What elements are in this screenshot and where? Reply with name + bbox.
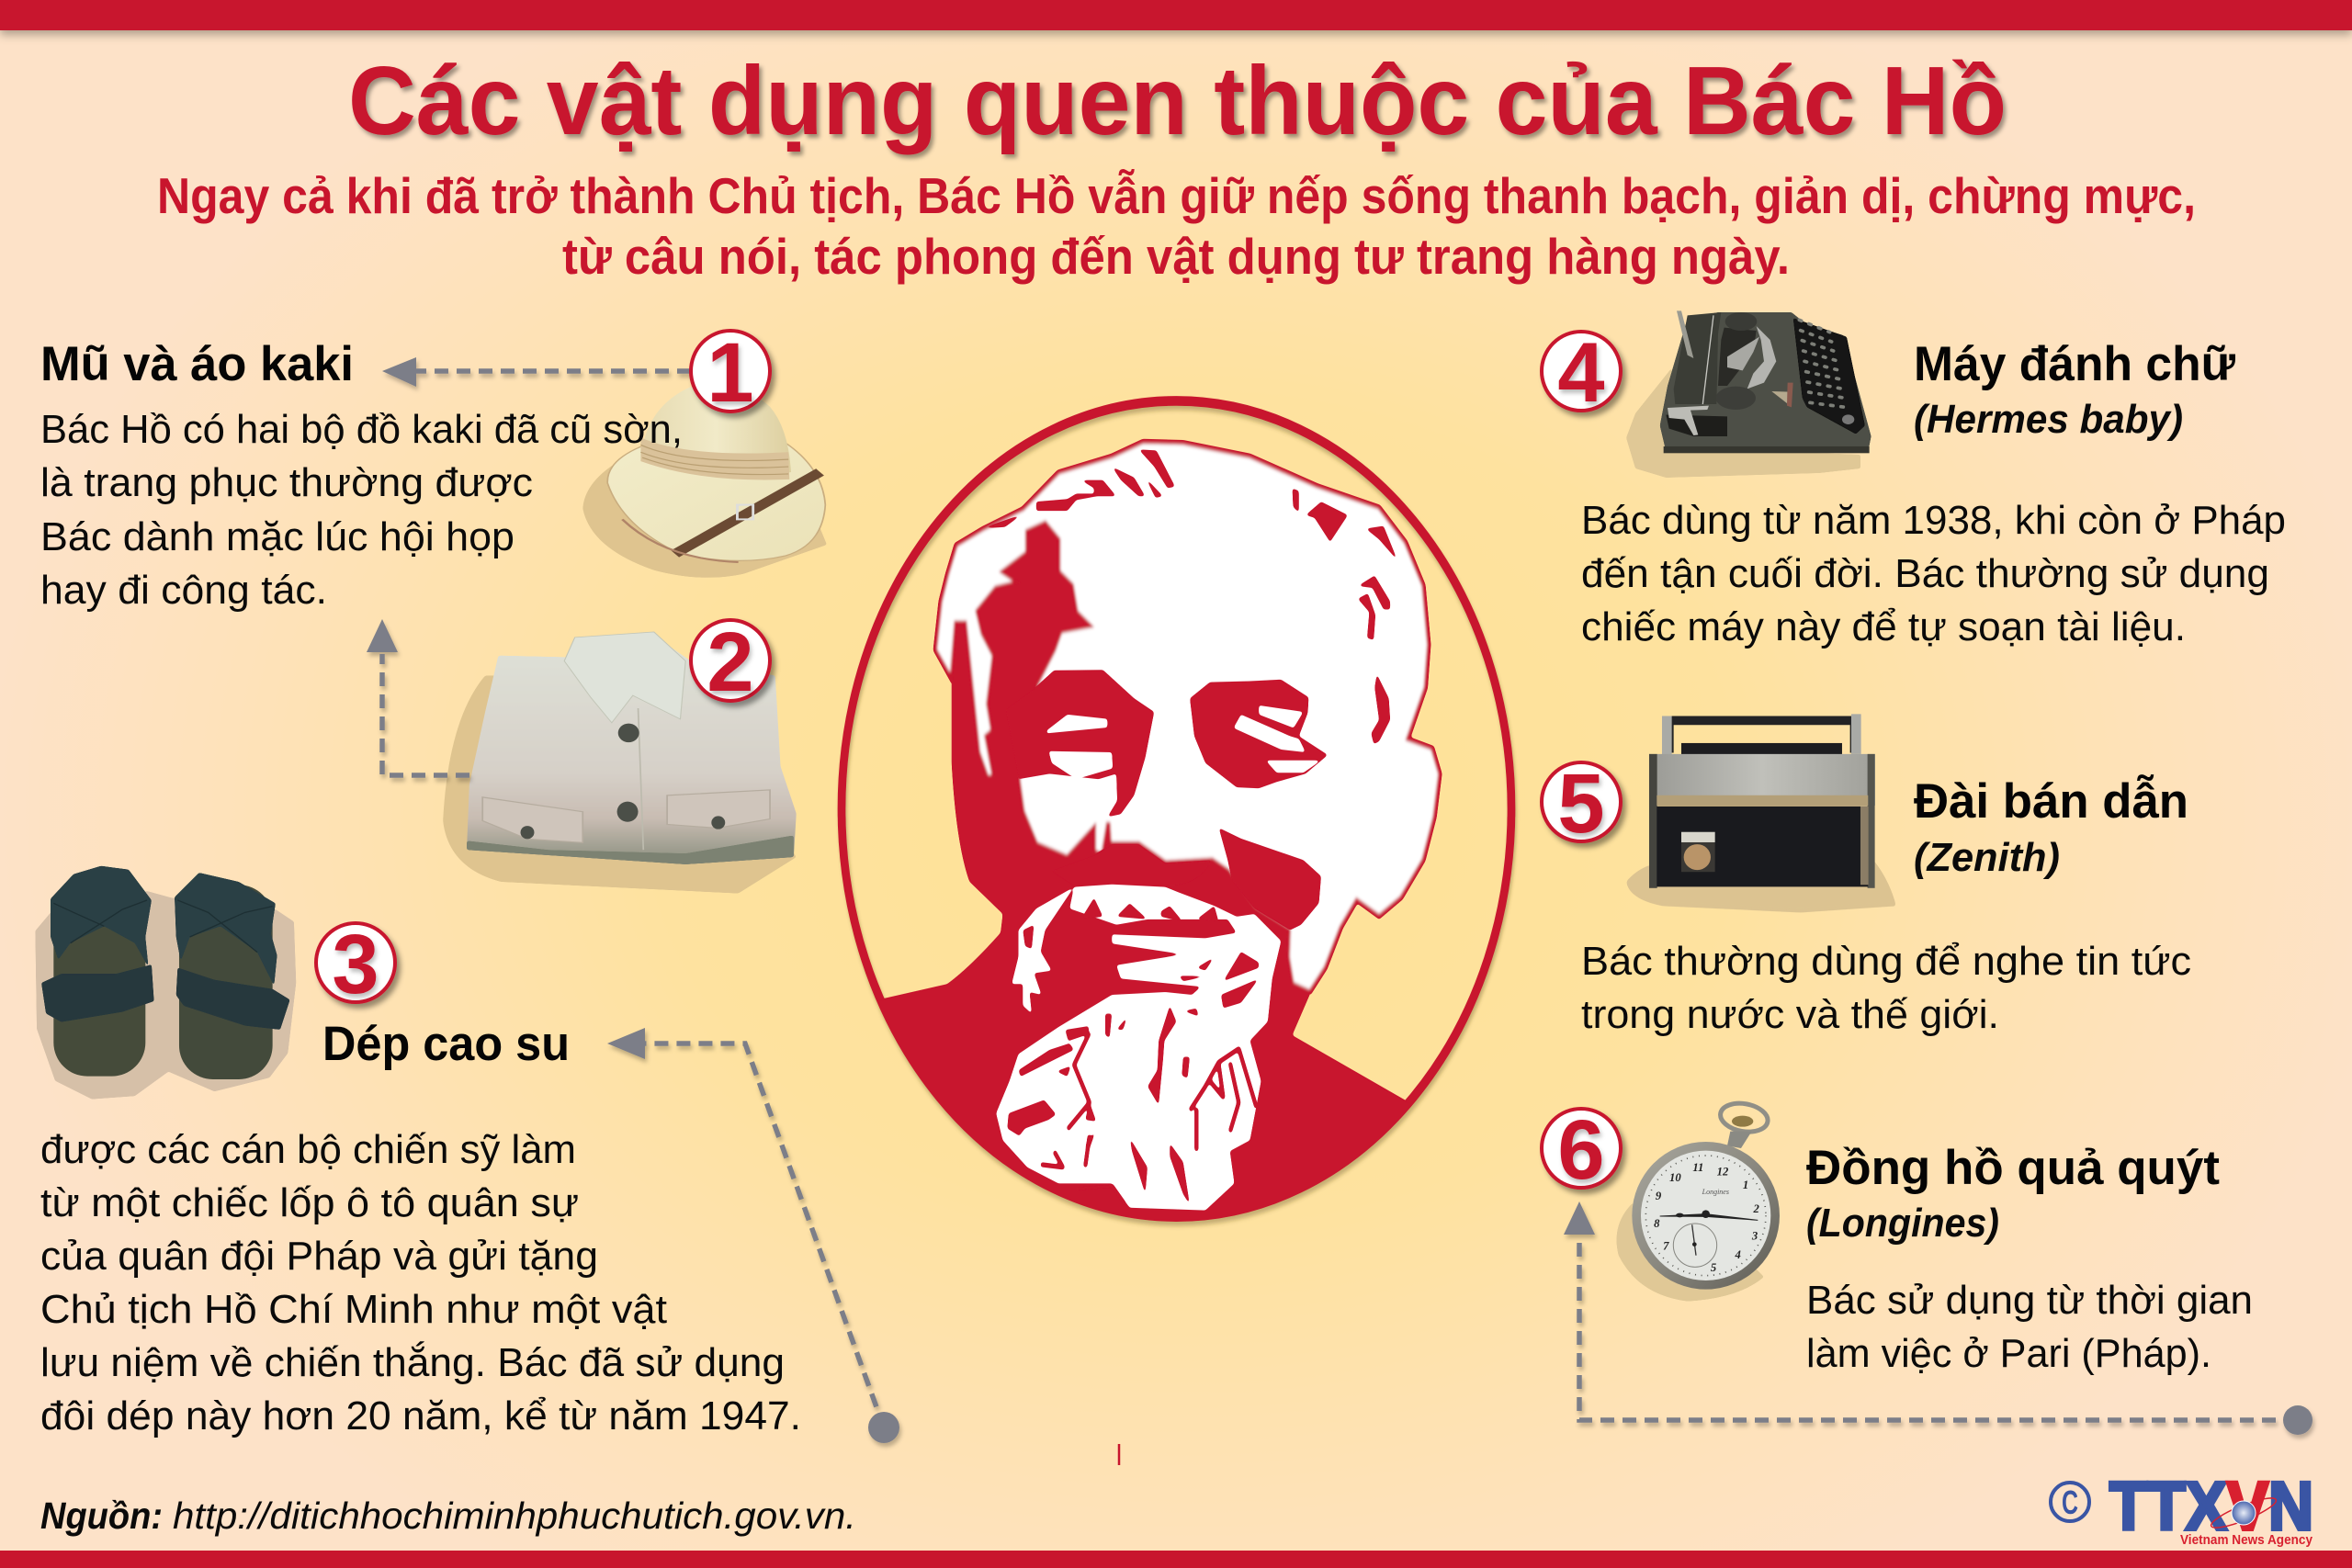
right band [176, 967, 290, 1030]
number badge 2: 2 [707, 615, 754, 709]
heading: Máy đánh chữ: (Hermes baby) [1914, 397, 2183, 442]
subtitle: từ câu nói, tác phong đến vật dụng tư trang hàng ngày. [562, 228, 1790, 285]
watch stem [1727, 1132, 1752, 1148]
watch sub dial [1673, 1224, 1717, 1267]
number badge 6: 6 [1557, 1103, 1605, 1197]
copyright symbol [2051, 1483, 2089, 1521]
shirt body [467, 636, 797, 864]
logo mark [1771, 391, 1790, 406]
hair strokes [980, 449, 1397, 744]
text: watch: làm việc ở Pari (Pháp). [1806, 1331, 2211, 1376]
type basket [1747, 326, 1776, 389]
left band [41, 964, 154, 1022]
white beard [996, 885, 1281, 1211]
shirt collar [564, 632, 685, 723]
watch case [1632, 1142, 1780, 1290]
globe [2209, 1493, 2278, 1533]
watch numerals: 11 [1692, 1161, 1703, 1174]
radio shadow [1626, 861, 1896, 912]
heading: Đồng hồ quả quýt: Đồng hồ quả quýt [1806, 1141, 2220, 1195]
text: sandals: lưu niệm về chiến thắng. Bác đã sử dụng [40, 1340, 785, 1385]
hat band [640, 437, 789, 479]
heading: Đài bán dẫn: (Zenith) [1914, 835, 2060, 880]
left eye socket [1005, 670, 1154, 817]
text: typewriter: đến tận cuối đời. Bác thường sử dụng [1581, 551, 2269, 596]
heading: Đồng hồ quả quýt [1806, 1141, 2220, 1246]
text: sandals: đôi dép này hơn 20 năm, kể từ năm 1947. [40, 1393, 801, 1438]
text: radio: Bác thường dùng để nghe tin tức [1581, 939, 2191, 984]
paper lever [1677, 310, 1693, 358]
radio dial [1681, 832, 1715, 872]
text: sandals: của quân đội Pháp và gửi tặng [40, 1234, 598, 1279]
watch numerals: 4 [1734, 1248, 1741, 1261]
title: Các vật dụng quen thuộc của Bác Hồ [348, 47, 2007, 155]
radio front [1657, 807, 1868, 886]
text: hat and shirt: là trang phục thường được [40, 460, 533, 505]
left eye highlights [1046, 715, 1113, 779]
carriage [1674, 312, 1721, 404]
portrait of Bác Hồ in oval [842, 400, 1511, 1275]
left sole [53, 897, 145, 1077]
oval frame [842, 400, 1511, 1217]
shirt buttons [521, 724, 725, 839]
text: sandals [40, 1127, 801, 1438]
item 1: hat [582, 385, 827, 578]
item 6: pocket watch [1616, 1100, 1780, 1302]
top bar [0, 0, 2352, 30]
red silhouette [881, 526, 1408, 1213]
watch face [1641, 1151, 1770, 1280]
watch ring [1718, 1100, 1770, 1135]
hat brim [607, 443, 825, 560]
source: http://ditichhochiminhphuchutich.gov.vn. [173, 1495, 856, 1537]
watch shadow [1616, 1203, 1764, 1302]
text: typewriter [1581, 498, 2286, 649]
hat dome [640, 385, 791, 477]
watch numerals: 10 [1669, 1171, 1681, 1184]
white face and hair [935, 441, 1440, 992]
radio handle [1671, 720, 1852, 752]
lower mechanism [1666, 415, 1727, 436]
stray marks [1118, 1444, 1120, 1465]
hat shadow [582, 446, 827, 578]
item 2: shirt [443, 632, 797, 894]
number badge 1 [691, 326, 770, 420]
text: radio [1581, 939, 2191, 1037]
heading: Máy đánh chữ: Máy đánh chữ [1914, 337, 2236, 391]
watch numerals: 7 [1663, 1240, 1669, 1253]
heading: Dép cao su: Dép cao su [322, 1017, 570, 1071]
typewriter body [1660, 312, 1871, 452]
cheek shadow [1219, 828, 1321, 931]
subtitle: Ngay cả khi đã trở thành Chủ tịch, Bác Hồ vẫn giữ nếp sống thanh bạch, giản dị, chừng mực, [157, 167, 2196, 224]
beard details [1007, 897, 1259, 1205]
watch numerals: 3 [1751, 1229, 1758, 1242]
text: typewriter: chiếc máy này để tự soạn tài liệu. [1581, 604, 2186, 649]
ribbon spools [1725, 312, 1757, 331]
shirt pockets [482, 790, 770, 842]
heading: Đồng hồ quả quýt: (Longines) [1806, 1201, 1999, 1246]
connector between 1 and 2 [738, 561, 743, 625]
text: hat and shirt: Bác dành mặc lúc hội họp [40, 514, 514, 559]
text: hat and shirt [40, 407, 683, 613]
right toe straps [175, 873, 277, 986]
base strip [1664, 446, 1870, 453]
arrow 6 [1564, 1201, 2312, 1435]
shirt hem [467, 835, 794, 864]
heading: Máy đánh chữ [1914, 337, 2236, 442]
item 4: typewriter [1626, 310, 1871, 478]
watch numerals: 9 [1656, 1190, 1662, 1202]
watch hands [1660, 1214, 1758, 1220]
watch numerals: 2 [1752, 1202, 1759, 1215]
agency name: Vietnam News Agency [2180, 1533, 2312, 1548]
arrow 3 [607, 1028, 899, 1443]
right eye highlights [1234, 705, 1321, 773]
sandal shadow [35, 891, 296, 1100]
number badge 5: 5 [1557, 757, 1605, 851]
moustache red [1049, 844, 1212, 887]
right sole [179, 885, 273, 1079]
watch crown [1732, 1116, 1753, 1127]
number badge 4: 4 [1557, 326, 1605, 420]
text: radio: trong nước và thế giới. [1581, 992, 1999, 1037]
hat rim shade [622, 519, 739, 562]
arrow 1 [382, 357, 691, 387]
logo: TTXVN: C [2062, 1483, 2078, 1521]
text: sandals: được các cán bộ chiến sỹ làm [40, 1127, 576, 1172]
item 5: radio [1626, 714, 1896, 912]
number badge 5 [1542, 757, 1621, 851]
number badge 6 [1542, 1103, 1621, 1197]
mechanism dark [1718, 328, 1757, 386]
source: Nguồn: [40, 1495, 163, 1537]
shirt shadow [443, 675, 797, 894]
number badge 3: 3 [332, 918, 379, 1011]
watch minute track [1645, 1156, 1766, 1276]
wordmark: TTXVN [2109, 1468, 2313, 1544]
watch numerals: Longines [1702, 1188, 1729, 1196]
bottom bar [0, 1551, 2352, 1568]
radio top panel [1649, 754, 1875, 806]
text: sandals: từ một chiếc lốp ô tô quân sự [40, 1180, 579, 1225]
shirt placket [639, 708, 643, 850]
heading: Mũ và áo kaki: Mũ và áo kaki [40, 337, 354, 391]
number badge 4 [1542, 326, 1621, 420]
typewriter shadow [1626, 367, 1860, 478]
watch numerals: 1 [1743, 1179, 1748, 1191]
number badge 1: 1 [707, 326, 754, 420]
text: hat and shirt: Bác Hồ có hai bộ đồ kaki đã cũ sờn, [40, 407, 683, 452]
arrow 2 [367, 619, 469, 775]
text: typewriter: Bác dùng từ năm 1938, khi còn ở Pháp [1581, 498, 2286, 543]
text: sandals: Chủ tịch Hồ Chí Minh như một vật [40, 1287, 667, 1332]
keyboard [1793, 318, 1865, 434]
right eye socket [1190, 680, 1328, 788]
hat strap [675, 472, 820, 554]
watch numerals: 5 [1711, 1261, 1716, 1274]
heading: Đài bán dẫn: Đài bán dẫn [1914, 773, 2188, 829]
number badge 3 [316, 918, 395, 1011]
text: hat and shirt: hay đi công tác. [40, 568, 327, 613]
text: watch: Bác sử dụng từ thời gian [1806, 1278, 2253, 1323]
watch numerals: 8 [1654, 1217, 1660, 1230]
subtitle [157, 167, 2196, 285]
left toe straps [51, 866, 152, 967]
item 3: sandals [35, 866, 296, 1100]
number badge 2 [691, 615, 770, 709]
watch numerals: 12 [1717, 1165, 1729, 1178]
logo: TTXVN [2051, 1468, 2313, 1548]
text: watch [1806, 1278, 2253, 1376]
watch numerals [1654, 1161, 1759, 1274]
heading: Đài bán dẫn [1914, 773, 2188, 880]
